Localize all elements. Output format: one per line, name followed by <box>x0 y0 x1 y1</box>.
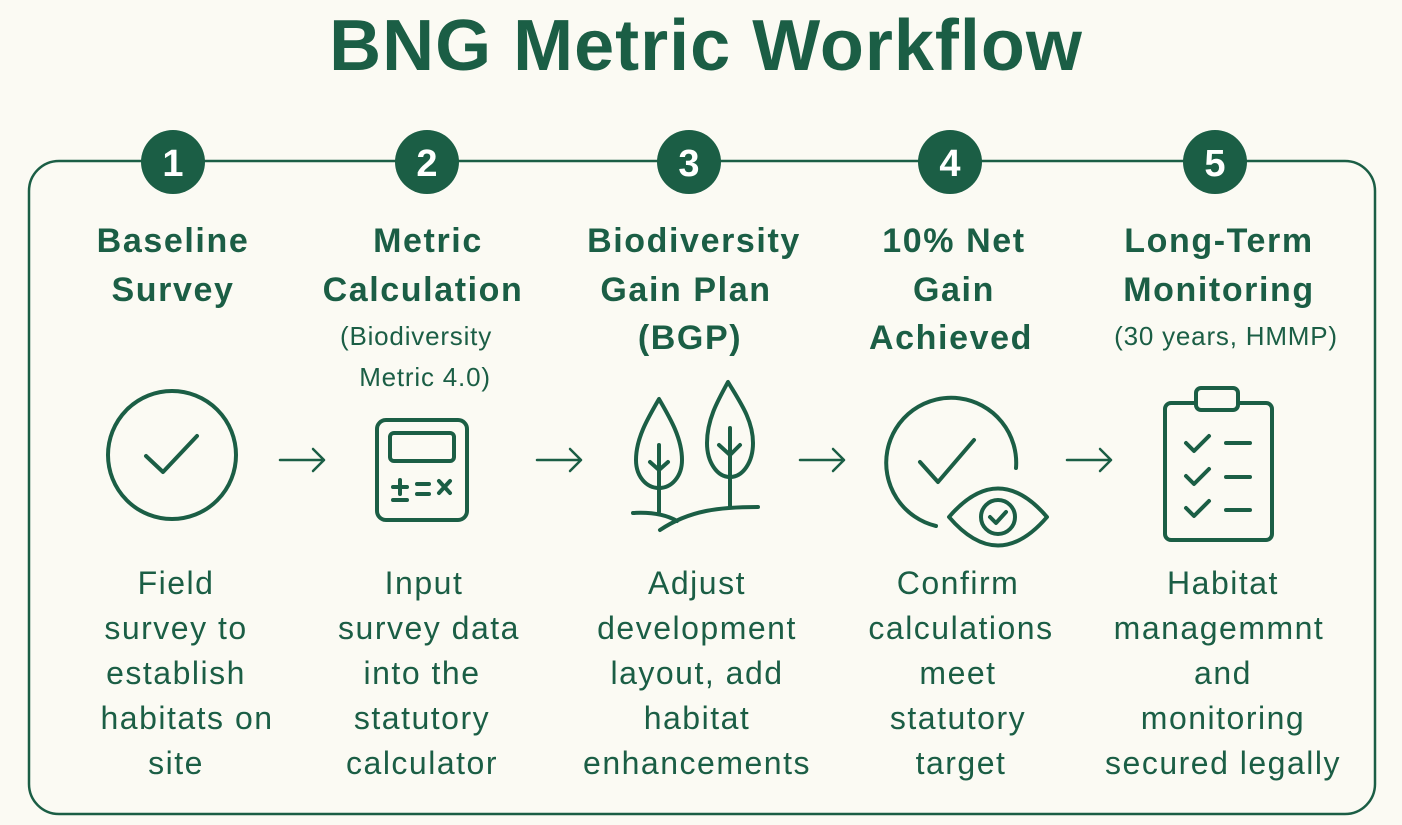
headings <box>97 222 1315 357</box>
descriptions: habitats on <box>100 700 274 736</box>
descriptions: statutory <box>354 700 490 736</box>
icon: trees <box>633 382 758 530</box>
descriptions: calculations <box>868 610 1054 646</box>
descriptions: Habitat <box>1167 565 1279 601</box>
arrows <box>280 449 1111 471</box>
headings: Gain <box>913 271 995 309</box>
descriptions <box>100 565 1341 781</box>
step badges: 1 <box>162 143 184 185</box>
headings: 10% Net <box>882 222 1026 260</box>
subheadings <box>340 321 1338 392</box>
subheadings: (30 years, HMMP) <box>1114 321 1338 351</box>
headings: Gain Plan <box>600 271 772 309</box>
icon: calculator <box>377 420 467 520</box>
headings: Monitoring <box>1123 271 1315 309</box>
descriptions: meet <box>919 655 997 691</box>
descriptions: into the <box>364 655 480 691</box>
icons <box>108 382 1272 546</box>
descriptions: Field <box>138 565 214 601</box>
descriptions: development <box>597 610 797 646</box>
descriptions: statutory <box>890 700 1026 736</box>
descriptions: establish <box>106 655 246 691</box>
headings: (BGP) <box>638 319 742 357</box>
title: BNG Metric Workflow <box>329 6 1083 86</box>
icon: check with eye <box>886 398 1047 546</box>
headings: Baseline <box>97 222 249 260</box>
descriptions: Adjust <box>648 565 746 601</box>
subheadings: Metric 4.0) <box>359 362 491 392</box>
step badges: 2 <box>416 143 438 185</box>
descriptions: Input <box>385 565 463 601</box>
panel: workflow frame <box>29 161 1375 814</box>
headings: Biodiversity <box>587 222 801 260</box>
descriptions: calculator <box>346 745 498 781</box>
headings: Survey <box>111 271 235 309</box>
icon: clipboard <box>1165 388 1272 540</box>
descriptions: secured legally <box>1105 745 1341 781</box>
descriptions: managemmnt <box>1114 610 1324 646</box>
headings: Long-Term <box>1124 222 1314 260</box>
headings: Calculation <box>323 271 523 309</box>
descriptions: target <box>916 745 1006 781</box>
descriptions: layout, add <box>610 655 784 691</box>
descriptions: survey to <box>104 610 248 646</box>
headings: Achieved <box>869 319 1033 357</box>
descriptions: monitoring <box>1141 700 1305 736</box>
step badges <box>141 130 1247 194</box>
descriptions: site <box>148 745 204 781</box>
step badges: 5 <box>1204 143 1226 185</box>
descriptions: and <box>1194 655 1252 691</box>
icon: check circle <box>108 391 236 519</box>
descriptions: habitat <box>644 700 750 736</box>
step badges: 3 <box>678 143 700 185</box>
descriptions: survey data <box>338 610 520 646</box>
descriptions: enhancements <box>583 745 811 781</box>
headings: Metric <box>373 222 483 260</box>
step badges: 4 <box>939 143 961 185</box>
descriptions: Confirm <box>897 565 1019 601</box>
subheadings: (Biodiversity <box>340 321 492 351</box>
